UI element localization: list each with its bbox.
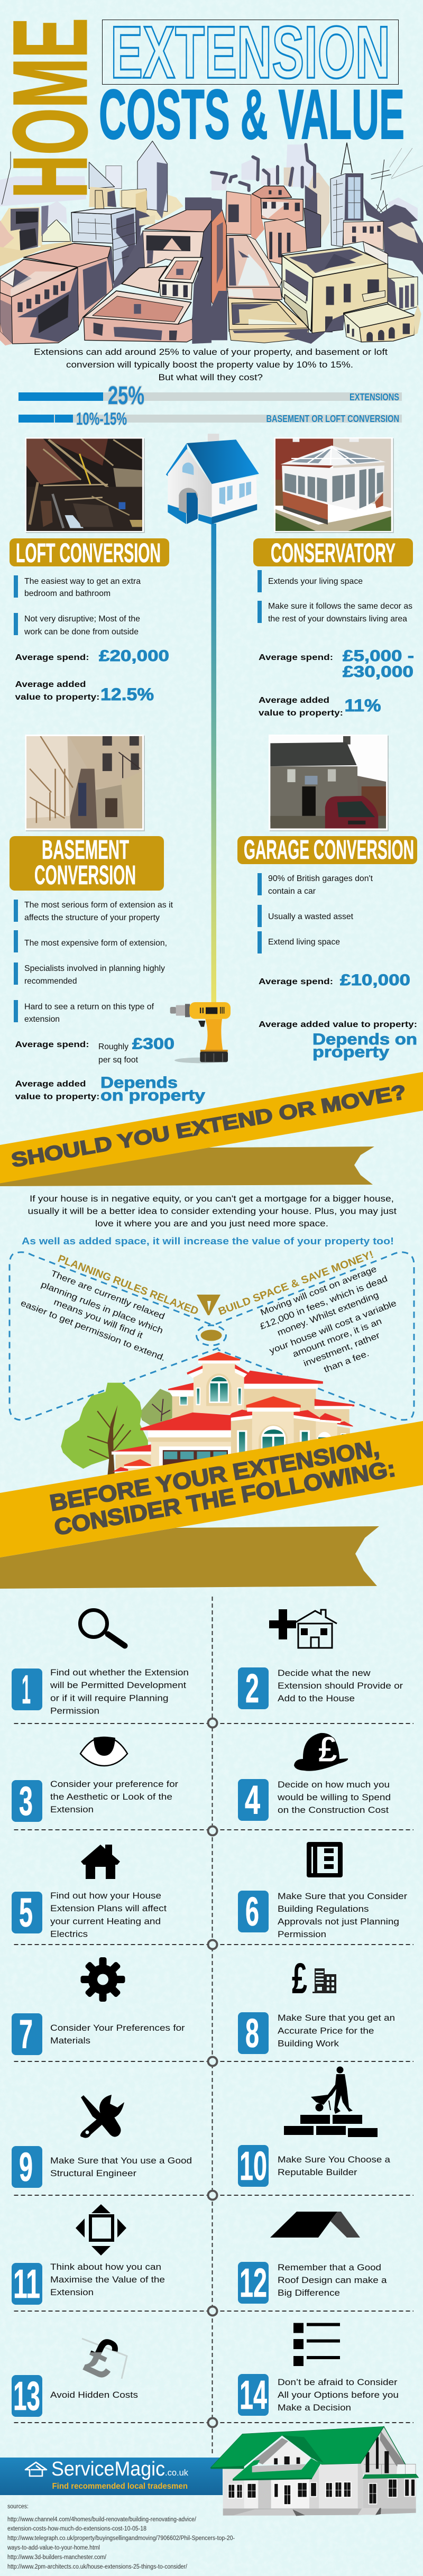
logo icon — [25, 2462, 47, 2476]
icon: hidden pound: £ — [77, 2324, 128, 2392]
stat: basement average spend: Roughly — [98, 1042, 128, 1051]
icon: blue house — [166, 434, 259, 525]
item text — [50, 1779, 178, 1814]
stat: loft average spend — [15, 647, 169, 665]
stat: basement added value: value to property: — [15, 1093, 99, 1101]
stat: basement added value: on property — [100, 1087, 205, 1104]
stat: garage added value: Average added value to property: — [259, 1020, 417, 1029]
stat: conservatory added value: 11% — [345, 696, 381, 715]
item text: Roof Design can make a — [278, 2275, 387, 2285]
icon: pound and building: £ — [292, 1955, 307, 2003]
icon: hard hat with pound — [294, 1729, 348, 1771]
number 12: 12 — [240, 2260, 267, 2306]
bullet: same decor — [258, 601, 412, 624]
illustration: city sketch skyline — [0, 141, 423, 345]
number 8: 8 — [245, 2011, 259, 2056]
bullet: easiest way — [14, 575, 141, 598]
intro paragraph: conversion will typically boost the property value by 10% to 15%. — [66, 360, 353, 370]
item 3 — [12, 1737, 178, 1824]
text block: build space and save money: than a fee. — [323, 1349, 370, 1374]
panel: conservatory — [253, 437, 414, 718]
item text: Electrics — [50, 1929, 88, 1939]
grid nodes — [208, 1719, 217, 2427]
item text — [50, 1891, 167, 1939]
bullet: specialists: recommended — [24, 977, 77, 986]
item text — [278, 2013, 395, 2049]
bullet: hard to see return: Hard to see a return on this type of — [24, 1003, 154, 1011]
item text — [277, 1780, 391, 1815]
bullet: living space: Extends your living space — [268, 577, 363, 586]
stat: loft added value: value to property: — [15, 693, 99, 702]
bar: basement or loft 10-15%: 10%-15% — [76, 409, 127, 428]
number 3: 3 — [19, 1779, 33, 1824]
banner: before your extension — [0, 1421, 423, 1589]
item text: Think about how you can — [50, 2262, 161, 2272]
item 8 — [238, 1955, 395, 2056]
item 9 — [12, 2095, 192, 2190]
number 10 — [238, 2143, 269, 2189]
item text: Find out whether the Extension — [50, 1667, 189, 1677]
ribbon: dark tail — [0, 1526, 379, 1589]
item 11 — [12, 2204, 165, 2307]
bullet: not disruptive: work can be done from outside — [24, 627, 139, 637]
item 6 — [238, 1842, 407, 1939]
photo: garage — [269, 735, 389, 831]
checklist grid dashed lines — [14, 1597, 413, 2455]
item text — [50, 2156, 192, 2178]
item 2 — [238, 1609, 403, 1711]
item text: Extension Plans will affect — [50, 1903, 167, 1913]
text block: planning rules relaxed: planning rules in place which — [40, 1280, 164, 1336]
dashed bow-tie callout frame — [10, 1252, 414, 1420]
number 1 — [12, 1667, 42, 1712]
panel: basement conversion — [10, 735, 205, 1104]
stat: basement average spend: per sq foot — [98, 1056, 139, 1065]
item text: Add to the House — [278, 1693, 355, 1703]
text block: extend or move paragraph: love it where you are and you just need more space. — [95, 1218, 328, 1229]
text block: planning rules relaxed: means you will find it — [52, 1297, 144, 1341]
bullet: most serious: The most serious form of extension as it — [24, 901, 173, 910]
bar: extensions 25%: EXTENSIONS — [350, 392, 399, 402]
stat: conservatory added value — [259, 696, 381, 718]
item text — [278, 2377, 399, 2413]
item text: Approvals not just Planning — [278, 1917, 399, 1927]
item text: the Aesthetic or Look of the — [50, 1792, 172, 1802]
number 12 — [238, 2260, 269, 2306]
number 11 — [12, 2261, 42, 2307]
text block: extend or move paragraph: As well as added space, it will increase the value of your property too! — [22, 1235, 394, 1246]
bullet: wasted asset: Usually a wasted asset — [268, 912, 354, 921]
item text — [278, 2262, 387, 2298]
bar chart: added value — [19, 382, 402, 428]
item text: Don’t be afraid to Consider — [278, 2377, 398, 2387]
item text — [50, 1667, 189, 1716]
item text: Find out how your House — [50, 1891, 161, 1901]
item text — [278, 2155, 391, 2177]
text block: sources: http://www.2pm-architects.co.uk/house-extensions-25-things-to-consider/ — [7, 2564, 188, 2570]
stat: conservatory average spend: £30,000 — [343, 663, 413, 681]
photo: loft — [25, 437, 145, 533]
bar: extensions 25% — [19, 382, 402, 410]
text block: extend or move paragraph: If your house is in negative equity, or you can't get a mortgage for a bigger house, — [30, 1194, 394, 1204]
heading text: BEFORE YOUR EXTENSION, — [48, 1435, 381, 1516]
bullet: most expensive: The most expensive form of extension, — [24, 939, 167, 948]
item text: Accurate Price for the — [278, 2025, 374, 2036]
item 5 — [12, 1845, 167, 1939]
bullet: 90% of garages: contain a car — [268, 887, 316, 896]
stat: basement average spend — [15, 1035, 174, 1065]
bar: basement or loft 10-15% — [19, 409, 402, 428]
stat: garage average spend: Average spend: — [259, 977, 333, 986]
text block: build space and save money: your house will cost a variable — [268, 1298, 398, 1356]
item 12 — [238, 2212, 387, 2306]
text block: sources: extension-costs-how-much-do-extensions-cost-10-05-18 — [7, 2526, 146, 2532]
icon: hidden pound: £ — [77, 2324, 128, 2392]
item text: Decide what the new — [278, 1668, 371, 1678]
item text: Extension — [50, 2287, 94, 2297]
bullet: not disruptive: Not very disruptive; Most of the — [24, 615, 140, 624]
number 6: 6 — [245, 1889, 259, 1935]
item 14 — [238, 2323, 399, 2418]
illustration: mansion with trees — [61, 1352, 354, 1493]
text block: sources: sources: — [7, 2504, 29, 2510]
heading: basement conversion — [10, 835, 164, 891]
item text: Consider your preference for — [50, 1779, 178, 1789]
stat: loft average spend: £20,000 — [99, 647, 169, 665]
bullet: wasted asset — [258, 905, 354, 927]
number 14 — [238, 2372, 269, 2418]
bullet: 90% of garages — [258, 873, 373, 896]
icon: eye — [80, 1737, 127, 1766]
number 13 — [12, 2373, 42, 2419]
item text: Permission — [278, 1929, 326, 1939]
heading: loft conversion — [10, 538, 169, 568]
item text — [50, 2262, 165, 2297]
panel: loft conversion — [10, 437, 169, 704]
icon: hidden pound — [81, 2337, 128, 2379]
icon: expand arrows — [76, 2204, 126, 2256]
item text — [50, 2023, 185, 2046]
text block: build space and save money: money. Whilst extending — [276, 1290, 380, 1338]
item text: Remember that a Good — [278, 2262, 381, 2272]
bullet: easiest way: The easiest way to get an extra — [24, 577, 141, 586]
stat: basement average spend: £300 — [132, 1035, 174, 1052]
logo wordmark: .co.uk — [165, 2468, 188, 2478]
item text: Make a Decision — [278, 2403, 351, 2413]
stat: loft added value — [15, 680, 154, 704]
city sketch: right half — [212, 143, 423, 344]
item text: your current Heating and — [50, 1917, 161, 1926]
text block: build space and save money: amount more, it is an — [291, 1316, 383, 1359]
intro paragraph: But what will they cost? — [159, 372, 263, 382]
text block: sources: http://www.channel4.com/4homes/build-renovate/building-renovating-advice/ — [7, 2516, 197, 2523]
item text: would be willing to Spend — [277, 1792, 391, 1802]
stat: garage average spend: £10,000 — [340, 971, 410, 989]
number 1: 1 — [22, 1667, 31, 1712]
bullet: specialists: Specialists involved in planning highly — [24, 964, 165, 973]
number 5: 5 — [19, 1890, 33, 1936]
bullet: most serious: affects the structure of your property — [24, 913, 160, 922]
footer banner: ServiceMagic — [0, 2458, 223, 2495]
text block: extend or move paragraph: usually it will be a better idea to consider extending your house. Plus, you may just — [27, 1206, 397, 1216]
bullet: 90% of garages: 90% of British garages don't — [268, 874, 373, 883]
text block: planning rules relaxed: easier to get permission to extend. — [20, 1298, 167, 1363]
heading text: CONSIDER THE FOLLOWING: — [52, 1456, 398, 1541]
bullet: same decor: Make sure it follows the same decor as — [268, 602, 412, 611]
timeline pole — [212, 524, 216, 1002]
icon: document — [307, 1842, 343, 1877]
stat: conservatory added value: value to property: — [259, 709, 343, 718]
text block: extend or move paragraph — [22, 1194, 397, 1246]
bullet: not disruptive — [14, 613, 140, 637]
item text: will be Permitted Development — [50, 1680, 186, 1690]
bullet: living space — [258, 570, 363, 592]
icon: gold V ribbon — [197, 1295, 220, 1315]
ribbon: yellow band — [0, 1072, 423, 1184]
stat: conservatory average spend: £5,000 - — [343, 647, 414, 665]
number 2: 2 — [245, 1666, 259, 1711]
item text: Materials — [50, 2036, 90, 2046]
item text: Make Sure that you get an — [278, 2013, 395, 2023]
number 11: 11 — [13, 2261, 40, 2307]
stat: conservatory average spend: Average spend: — [259, 653, 333, 662]
heading text: SHOULD YOU EXTEND OR MOVE? — [10, 1081, 408, 1172]
bullet: easiest way: bedroom and bathroom — [24, 589, 111, 598]
photo: basement — [25, 735, 145, 831]
icon: gold oval — [201, 1330, 222, 1341]
stat: basement average spend: Average spend: — [15, 1040, 89, 1049]
item text: Building Work — [278, 2038, 339, 2049]
icon: builder with wheelbarrow on bricks — [284, 2067, 378, 2137]
text block: sources: http://www.telegraph.co.uk/property/buyingsellingandmoving/7906602/Phil-Spencers-top-20- — [7, 2535, 235, 2542]
number 7: 7 — [19, 2012, 33, 2057]
text block: build space and save money: BUILD SPACE & SAVE MONEY! — [217, 1249, 375, 1318]
item 10 — [238, 2067, 391, 2189]
stat: loft average spend: Average spend: — [15, 653, 89, 662]
bullet: specialists — [14, 962, 165, 986]
icon: plus and house — [269, 1609, 337, 1648]
item text: Make Sure that you Consider — [278, 1891, 407, 1901]
stat: loft added value: Average added — [15, 680, 86, 689]
item text: Structural Engineer — [50, 2168, 136, 2178]
bullet: most expensive — [14, 930, 167, 952]
item text: Extension should Provide or — [278, 1681, 403, 1691]
stat: basement added value: Average added — [15, 1080, 86, 1088]
item text — [278, 1891, 407, 1939]
text block: sources — [7, 2504, 235, 2570]
number 9: 9 — [19, 2144, 33, 2190]
bullet: same decor: the rest of your downstairs living area — [268, 615, 407, 624]
item text: Consider Your Preferences for — [50, 2023, 185, 2033]
item text — [278, 1668, 403, 1703]
item text: Maximise the Value of the — [50, 2275, 165, 2285]
heading: loft conversion: LOFT CONVERSION — [16, 538, 161, 568]
city sketch: left half — [0, 141, 212, 345]
stat: basement added value — [15, 1074, 205, 1104]
stat: garage added value: Depends on — [312, 1031, 417, 1048]
ribbon: yellow band — [0, 1421, 423, 1557]
bullet: extend living space — [258, 931, 340, 954]
number 4: 4 — [245, 1777, 260, 1823]
text block: sources: ways-to-add-value-to-your-home.html — [7, 2545, 100, 2551]
icon: wrench and screwdriver — [80, 2095, 124, 2138]
item text: on the Construction Cost — [278, 1805, 389, 1815]
stat: garage added value — [259, 1020, 417, 1061]
number 14: 14 — [240, 2372, 267, 2418]
stat: conservatory average spend — [259, 647, 414, 681]
item text: Reputable Builder — [278, 2167, 357, 2177]
icon: hard hat with pound: £ — [318, 1729, 337, 1770]
bullet: extend living space: Extend living space — [268, 938, 340, 947]
ribbon: dark tail — [0, 1147, 374, 1186]
icon: yellow drill — [170, 1002, 231, 1063]
panel: garage conversion — [237, 735, 417, 1061]
icon: roof — [270, 2212, 360, 2238]
text block: build space and save money — [217, 1249, 398, 1374]
item 4 — [238, 1729, 391, 1823]
logo wordmark: ServiceMagic — [51, 2458, 165, 2480]
item 1 — [12, 1610, 189, 1716]
text block: sources: http://www.3d-builders-manchester.com/ — [7, 2554, 107, 2561]
stat: basement added value: Depends — [100, 1074, 178, 1092]
item text: Avoid Hidden Costs — [50, 2390, 138, 2400]
intro paragraph — [34, 347, 388, 382]
stat: garage average spend — [259, 971, 410, 989]
stat: garage added value: property — [312, 1043, 389, 1061]
heading: basement conversion: BASEMENT — [42, 835, 129, 865]
item 7 — [12, 1948, 185, 2057]
icon: pound and building — [292, 1955, 336, 2003]
stat: loft added value: 12.5% — [100, 685, 154, 704]
item text: Permission — [50, 1706, 99, 1716]
icon: gear — [71, 1948, 134, 2011]
bullet: hard to see return — [14, 1000, 154, 1024]
item text: Make Sure You Choose a — [278, 2155, 391, 2165]
stat: conservatory added value: Average added — [259, 696, 329, 705]
item text: All your Options before you — [278, 2390, 399, 2400]
item text: Make Sure that You use a Good — [50, 2156, 192, 2166]
banner: should you extend or move — [0, 1072, 423, 1186]
item text: Building Regulations — [278, 1904, 369, 1914]
text block: build space and save money: £12,000 in fees, which is dead — [259, 1274, 389, 1332]
text block: planning rules relaxed: There are currently relaxed — [50, 1269, 166, 1322]
photo: conservatory — [274, 437, 394, 533]
number 13: 13 — [13, 2373, 40, 2419]
icon: solid house — [81, 1845, 120, 1879]
text block: build space and save money: Moving will cost on average — [259, 1264, 378, 1317]
icon: magnifying glass — [80, 1610, 125, 1646]
illustration: green roof house — [210, 2426, 419, 2516]
heading: basement conversion: CONVERSION — [34, 860, 136, 890]
bullet: most serious — [14, 900, 173, 922]
item text: Decide on how much you — [278, 1780, 390, 1790]
tagline: Find recommended local tradesmen — [52, 2482, 188, 2491]
item text: Extension — [50, 1804, 94, 1814]
text block: build space and save money: investment, rather — [302, 1331, 381, 1369]
intro paragraph: Extensions can add around 25% to value of your property, and basement or loft — [34, 347, 388, 357]
number 10: 10 — [240, 2143, 267, 2189]
item text: Big Difference — [278, 2288, 340, 2298]
bar: extensions 25%: 25% — [108, 382, 144, 410]
text block: planning rules relaxed — [20, 1253, 200, 1363]
item 13 — [12, 2337, 137, 2417]
icon: checklist — [293, 2323, 340, 2366]
item text: or if it will require Planning — [50, 1693, 168, 1703]
text block: planning rules relaxed: PLANNING RULES RELAXED — [56, 1253, 200, 1317]
bullet: hard to see return: extension — [24, 1015, 60, 1024]
